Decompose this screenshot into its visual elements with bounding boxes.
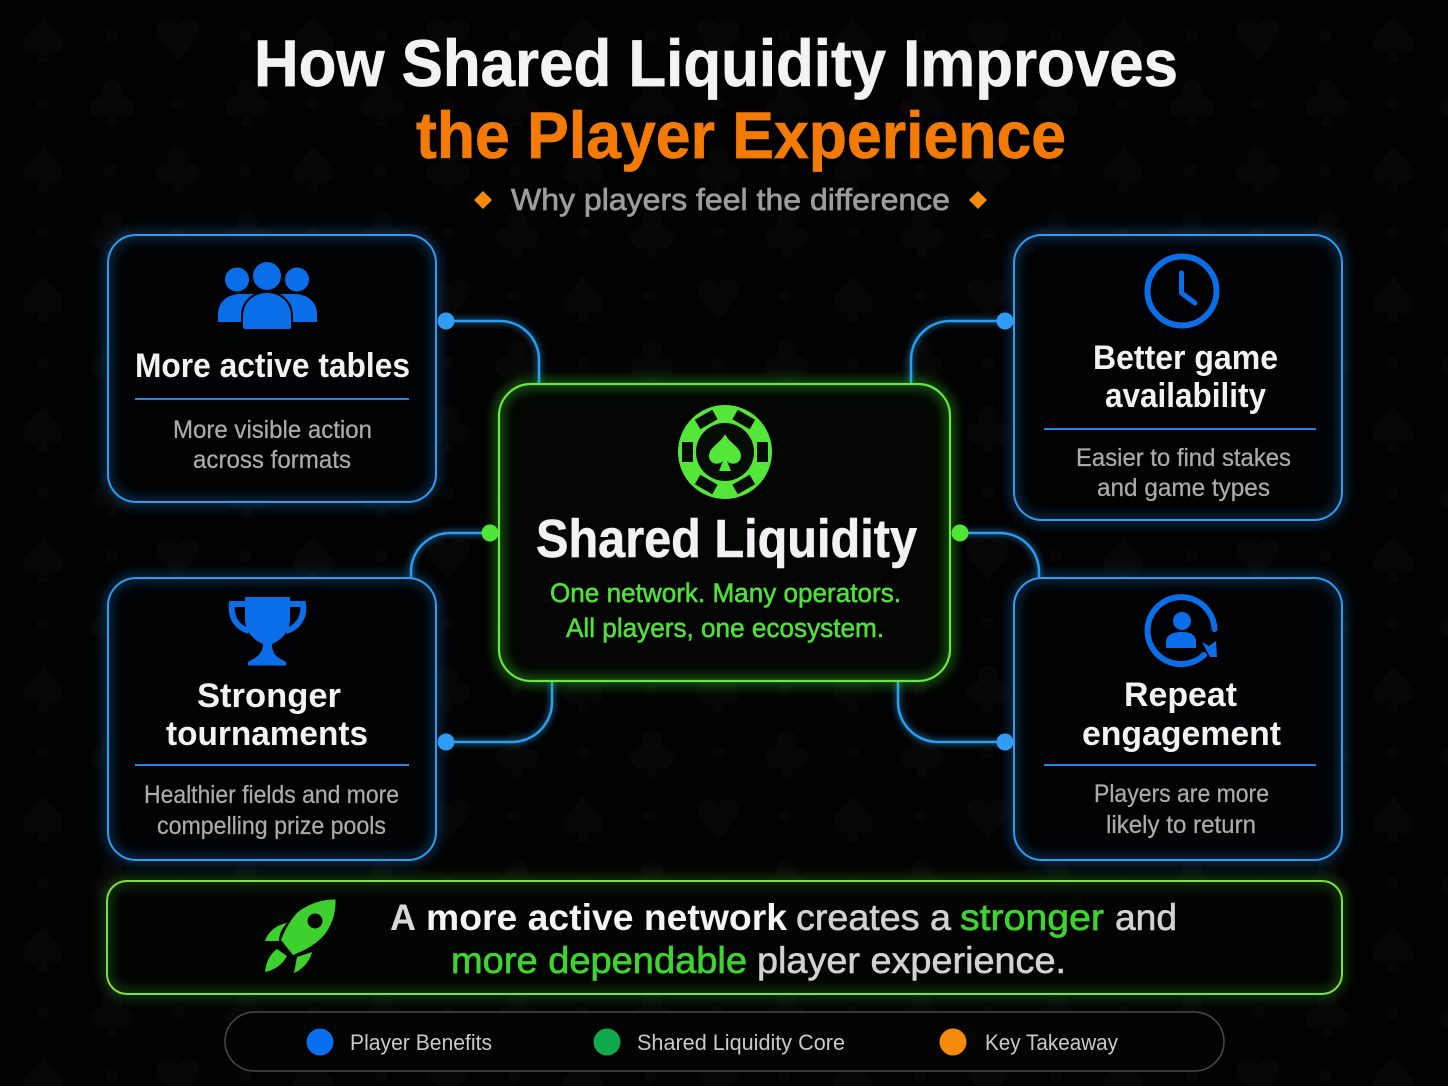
- legend item: shared liquidity core: Shared Liquidity Core: [637, 1030, 845, 1055]
- legend item: key takeaway: [940, 1028, 1118, 1056]
- icon: returning player: [1148, 597, 1217, 664]
- tagline: [550, 578, 901, 643]
- description: Easier to find stakes: [1076, 444, 1291, 472]
- icon: rocket: [265, 899, 336, 973]
- heading: Better game: [1093, 339, 1278, 377]
- tagline: All players, one ecosystem.: [566, 613, 884, 643]
- icon: trophy: [232, 597, 303, 666]
- connector: core to bottom right card: [960, 533, 1039, 578]
- description: [1094, 780, 1269, 839]
- icon: poker chip with spade: [678, 405, 772, 499]
- heading: [1093, 339, 1278, 415]
- takeaway statement: A: [390, 897, 416, 938]
- heading: [1082, 676, 1281, 753]
- panel: shared liquidity core: [499, 384, 950, 681]
- connector: bottom right card to core: [898, 681, 1005, 742]
- legend item: player benefits: Player Benefits: [350, 1030, 492, 1055]
- description: likely to return: [1106, 811, 1256, 839]
- takeaway statement: creates a: [796, 897, 951, 938]
- legend item: player benefits: [306, 1028, 492, 1056]
- heading: Shared Liquidity: [536, 509, 917, 569]
- takeaway statement: player experience.: [757, 940, 1066, 981]
- title: How Shared Liquidity Improves: [254, 26, 1178, 100]
- description: [1076, 444, 1291, 502]
- icon: clock: [1148, 256, 1216, 326]
- subtitle: Why players feel the difference: [511, 182, 950, 217]
- connector: top left card to core: [446, 321, 539, 384]
- panel: repeat engagement: [1014, 578, 1342, 860]
- description: compelling prize pools: [157, 812, 386, 840]
- takeaway statement: more dependable: [451, 940, 747, 981]
- takeaway statement: more active network: [426, 897, 787, 938]
- panel: better game availability: [1014, 235, 1342, 520]
- tagline: One network. Many operators.: [550, 578, 901, 608]
- description: and game types: [1097, 474, 1270, 502]
- connector node dots: green: [482, 524, 968, 542]
- panel: key takeaway: [107, 881, 1342, 994]
- heading: tournaments: [166, 715, 368, 753]
- panel: stronger tournaments: [108, 578, 436, 860]
- connector: top right card to core: [911, 321, 1005, 384]
- heading: engagement: [1082, 715, 1281, 753]
- takeaway statement: and: [1115, 897, 1177, 938]
- heading: Stronger: [197, 677, 341, 715]
- connector: core to bottom left card: [411, 533, 490, 578]
- connector: bottom left card to core: [446, 681, 552, 742]
- heading: Repeat: [1124, 676, 1237, 714]
- heading: availability: [1105, 377, 1266, 415]
- takeaway statement: stronger: [960, 897, 1104, 938]
- legend item: key takeaway: Key Takeaway: [985, 1030, 1118, 1055]
- description: across formats: [193, 446, 351, 474]
- icon: group of people: [218, 262, 317, 329]
- description: More visible action: [173, 416, 372, 444]
- description: Healthier fields and more: [144, 781, 399, 809]
- title: the Player Experience: [416, 98, 1066, 172]
- description: [144, 781, 399, 840]
- title: [254, 26, 1178, 172]
- panel: more active tables: [108, 235, 436, 502]
- legend: [225, 1012, 1224, 1071]
- description: Players are more: [1094, 780, 1269, 808]
- takeaway statement: [390, 897, 1177, 981]
- description: [173, 416, 372, 474]
- heading: [166, 677, 368, 753]
- heading: More active tables: [135, 347, 410, 385]
- connector node dots: blue: [438, 312, 1014, 750]
